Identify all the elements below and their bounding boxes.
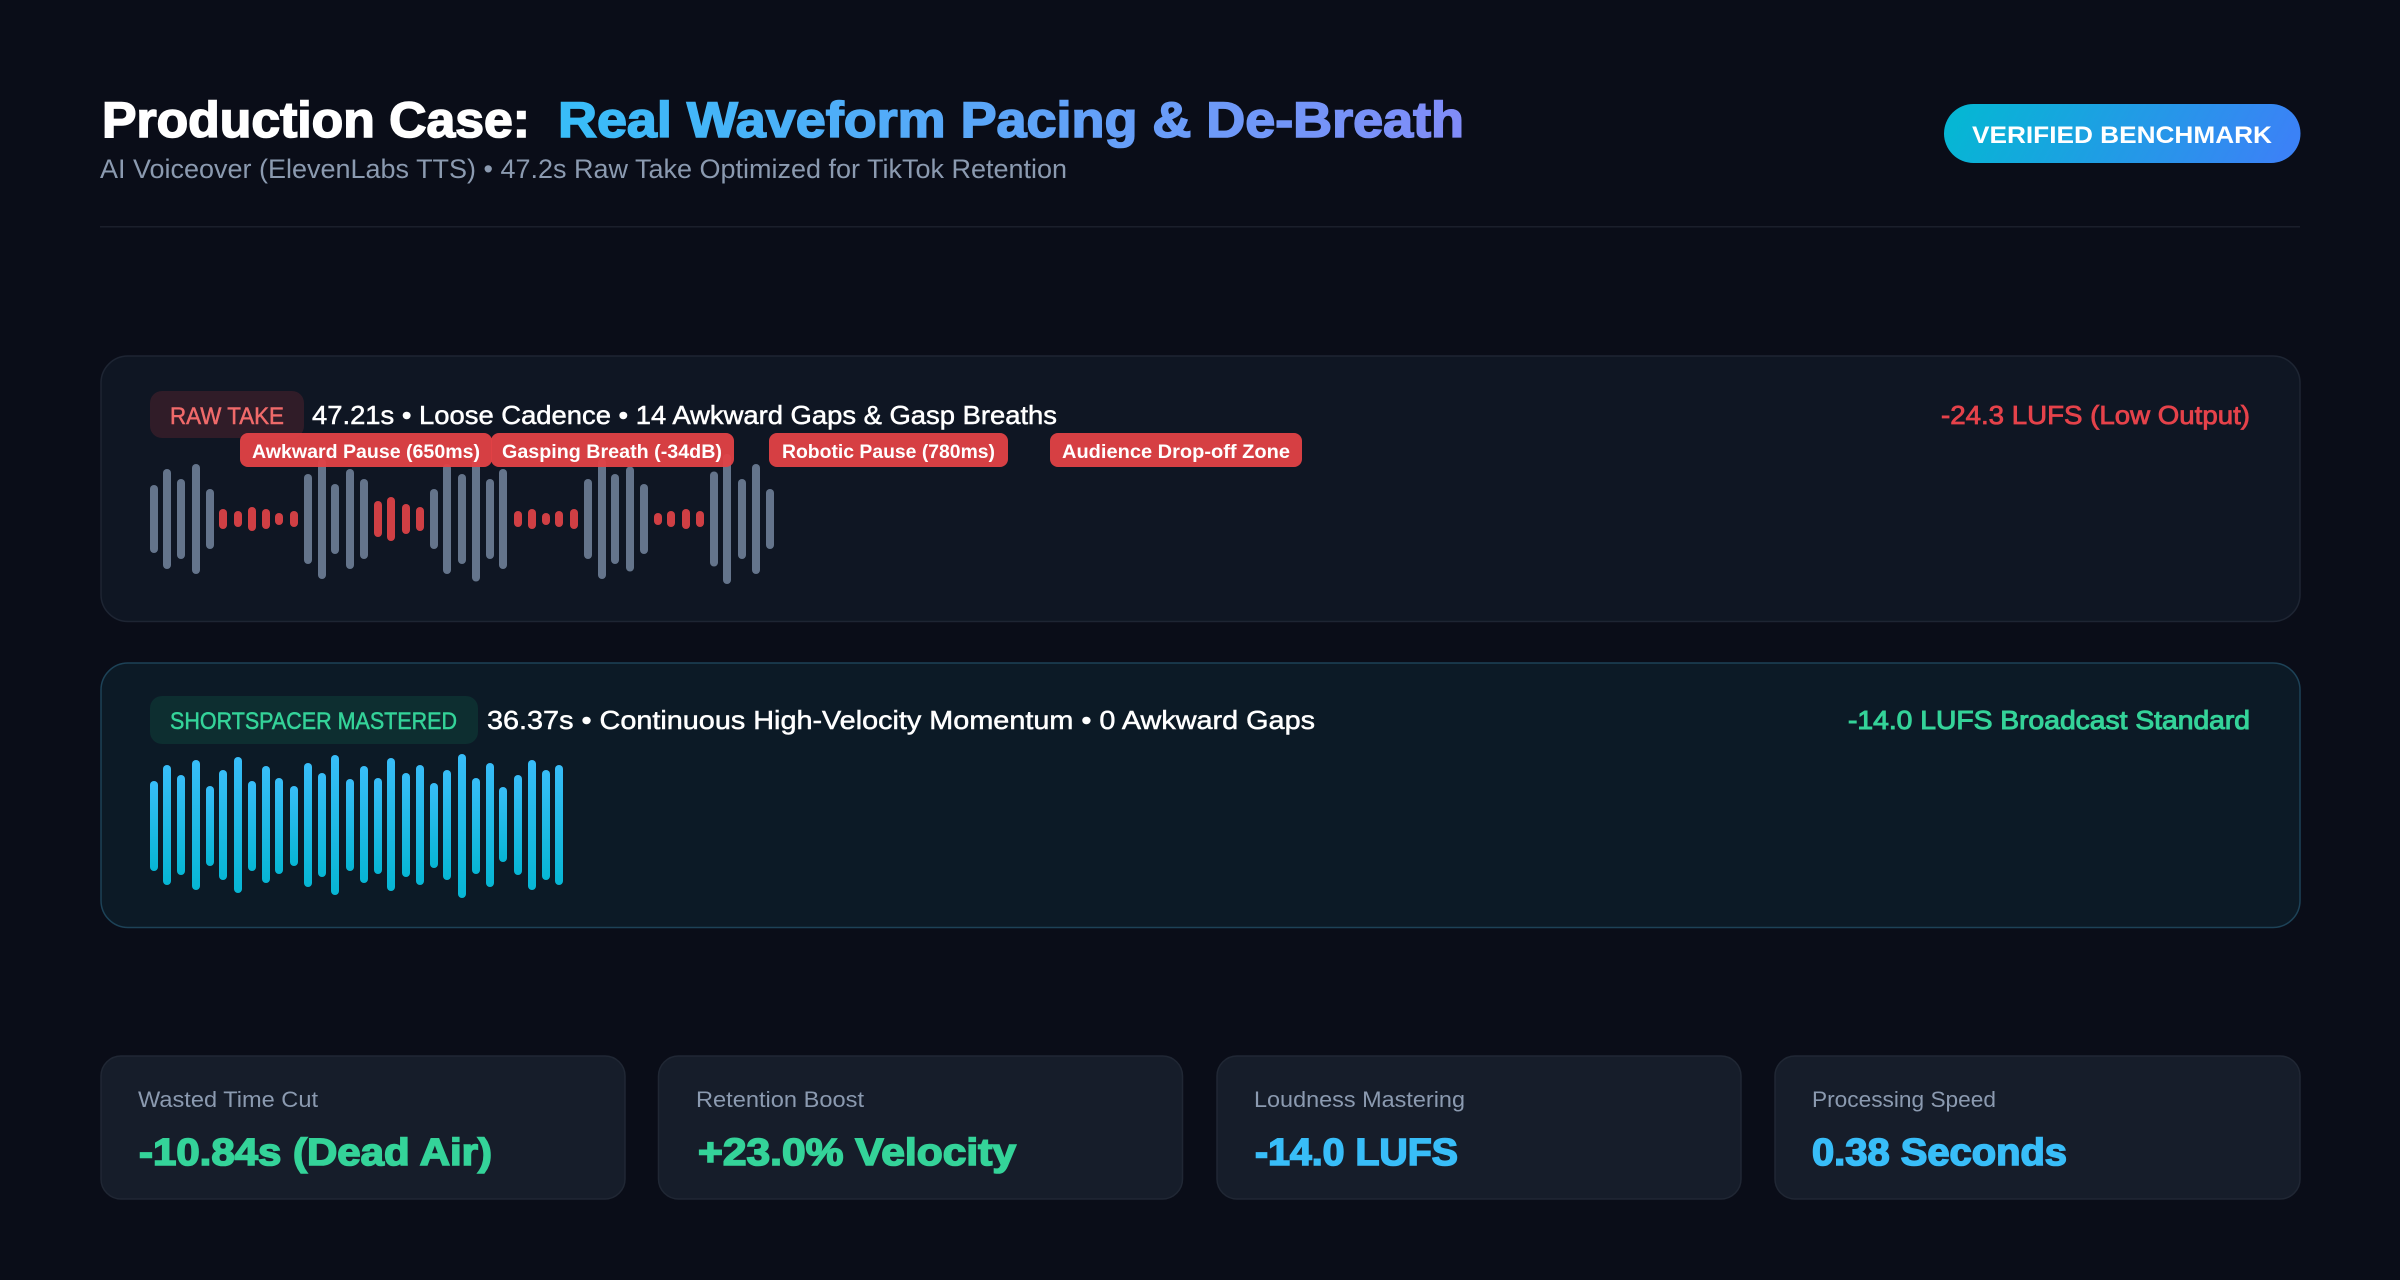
stat value: -14.0 LUFS [1255,1132,1458,1174]
tag: audience drop-off: Audience Drop-off Zone [1062,442,1290,463]
badge: raw take [150,391,304,438]
tag: robotic pause [769,433,1008,467]
mastered waveform [150,754,563,898]
tag: audience drop-off [1050,433,1302,467]
tag: gasping breath: Gasping Breath (-34dB) [502,442,722,463]
tag: gasping breath [491,433,734,467]
raw take summary: 47.21s • Loose Cadence • 14 Awkward Gaps & Gasp Breaths [312,400,1057,430]
stat value: -10.84s (Dead Air) [139,1132,492,1174]
subtitle: AI Voiceover (ElevenLabs TTS) • 47.2s Raw Take Optimized for TikTok Retention [100,154,1067,184]
title: Real Waveform Pacing & De-Breath [558,92,1464,148]
stat label: Loudness Mastering [1254,1087,1465,1112]
stat label: Wasted Time Cut [138,1087,318,1112]
stat label: Retention Boost [696,1087,864,1112]
mastered summary: 36.37s • Continuous High-Velocity Momentum • 0 Awkward Gaps [487,705,1315,735]
panel: raw take [101,356,2300,622]
stat value: 0.38 Seconds [1812,1132,2067,1174]
tag: awkward pause [240,433,492,467]
stat card: retention boost [658,1056,1182,1199]
mastered loudness: -14.0 LUFS Broadcast Standard [1848,705,2250,735]
tag: awkward pause: Awkward Pause (650ms) [252,442,480,463]
header [100,92,2300,184]
badge: verified benchmark: VERIFIED BENCHMARK [1972,122,2273,149]
panel: shortspacer mastered [101,663,2300,928]
stat value: +23.0% Velocity [698,1132,1016,1174]
stat card: processing speed [1775,1056,2300,1199]
badge: shortspacer mastered: SHORTSPACER MASTERED [170,708,457,735]
badge: raw take: RAW TAKE [170,403,284,430]
raw loudness: -24.3 LUFS (Low Output) [1941,400,2250,430]
raw waveform [150,454,774,584]
title: Production Case: [102,92,530,148]
title [102,92,1464,148]
stat card: wasted time cut [101,1056,625,1199]
badge: verified benchmark [1944,104,2300,163]
stat label: Processing Speed [1812,1087,1996,1112]
tag: robotic pause: Robotic Pause (780ms) [782,442,995,463]
badge: shortspacer mastered [150,696,478,744]
stat card: loudness mastering [1217,1056,1741,1199]
